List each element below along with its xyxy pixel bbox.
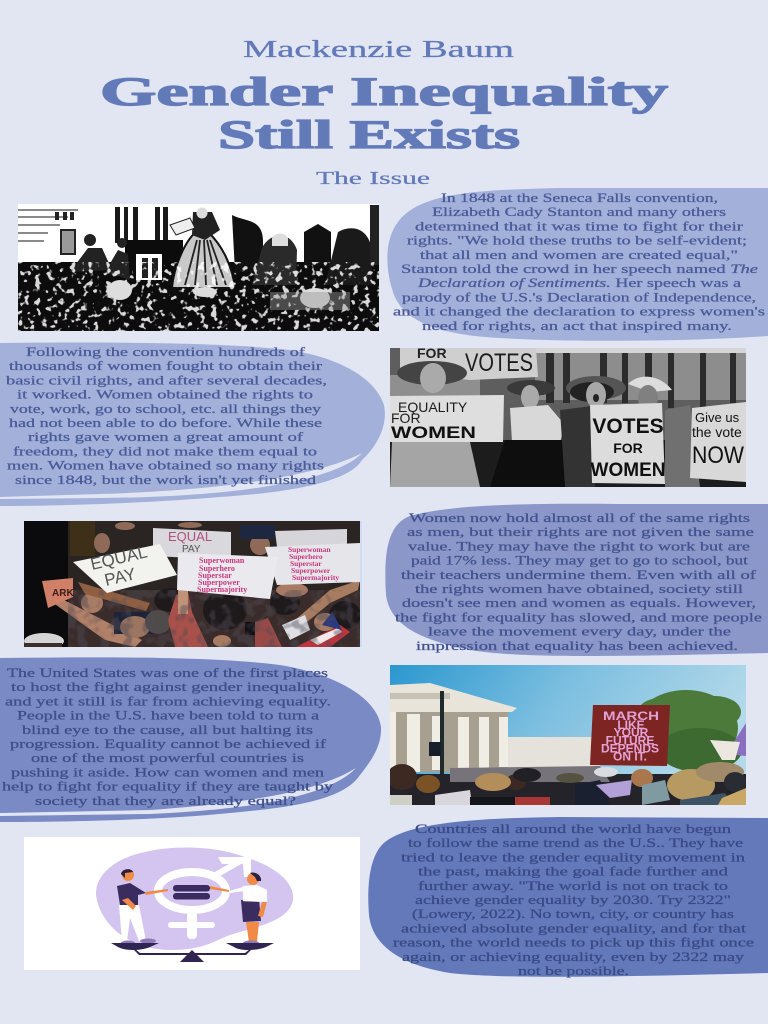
crowd (387, 762, 746, 805)
panel: United States text: progression. Equality cannot be achieved if (10, 737, 327, 751)
panel: Seneca Falls text (387, 188, 768, 341)
panel: rights not valued text: the fight for equality has slowed, and more people (395, 610, 763, 624)
panel: Seneca Falls text: need for rights, an act that inspired many. (422, 319, 732, 333)
panel: rights not valued text: their teachers undermine them. Even with all of (401, 568, 757, 582)
panel: United States text: society that they are already equal? (35, 794, 297, 808)
panel: rights not valued text: value. They may have the right to work but are (408, 539, 751, 553)
sign: superwoman centre: Superhero (199, 564, 235, 573)
sign: march like your future: YOUR (614, 726, 649, 740)
panel: Seneca Falls text: Stanton told the crowd in her speech named The (401, 262, 759, 276)
sign: votes for women (590, 403, 665, 484)
sign: equality for women: WOMEN (391, 423, 476, 442)
sign: equal pay top: EQUAL (168, 529, 212, 544)
sign: superwoman centre: Supermajority (197, 585, 247, 594)
section heading: The Issue (316, 168, 430, 188)
panel: worldwide trend text: achieve gender equality by 2030. Try 2322" (415, 893, 731, 907)
sign: give us the vote now: NOW (692, 442, 744, 469)
panel: fight for civil rights text: it worked. Women obtained the rights to (17, 388, 313, 402)
panel: United States text: one of the most powerful countries is (31, 751, 304, 765)
panel: fight for civil rights text: thousands of women fought to obtain their (9, 359, 323, 373)
image: equal pay rally (24, 521, 361, 649)
sign: give us the vote now: Give us (695, 410, 740, 425)
panel: Seneca Falls text: In 1848 at the Seneca Falls convention, (441, 191, 718, 205)
panel: Seneca Falls text: Elizabeth Cady Stanton and many others (432, 205, 726, 219)
tree (634, 690, 742, 772)
sign: votes for women: VOTES (592, 415, 664, 438)
panel: fight for civil rights text: rights gave women a great amount of (28, 430, 304, 444)
panel: worldwide trend text: the past, making the goal fade further and (418, 865, 729, 879)
panel: worldwide trend text: not be possible. (518, 964, 629, 978)
sign: superwoman right (265, 543, 360, 585)
panel: United States text: to host the fight against gender inequality, (11, 680, 325, 694)
panel: rights not valued text (385, 504, 768, 656)
sign: votes for women: FOR (613, 440, 643, 456)
sign: equal pay top: PAY (182, 544, 201, 555)
panel: worldwide trend text: to follow the same trend as the U.S.. They have (408, 836, 744, 850)
title: Gender Inequality (100, 69, 668, 114)
image: woodcut of the convention (18, 204, 379, 331)
panel: fight for civil rights text (0, 343, 385, 506)
title (100, 69, 668, 157)
sign: votes: VOTES (465, 349, 533, 377)
sign: votes for women: WOMEN (591, 460, 665, 481)
panel: worldwide trend text: achieved absolute gender equality, and for that (401, 921, 747, 935)
sign: equality for women: EQUALITY (398, 399, 468, 415)
panel: fight for civil rights text: basic civil rights, and after several decades, (6, 373, 327, 387)
panel: United States text: The United States was one of the first places (7, 666, 328, 680)
panel: rights not valued text: impression that equality has been achieved. (416, 639, 738, 653)
sign: no ark: ARK (52, 588, 74, 599)
figure: man (117, 869, 168, 946)
panel: United States text (0, 657, 381, 822)
sign: equal pay left: PAY (103, 564, 138, 590)
sign: superwoman centre: Superstar (198, 571, 232, 580)
sign: march like your future: LIKE (617, 718, 645, 732)
panel: worldwide trend text: (Lowery, 2022). No town, city, or country has (412, 907, 734, 921)
panel: Seneca Falls text: Declaration of Sentiments. Her speech was a (417, 276, 742, 290)
image: suffragettes with signs (390, 345, 746, 487)
sign: equal pay top (153, 528, 231, 560)
sign: march like your future: ON IT. (613, 750, 647, 764)
panel: rights not valued text: Women now hold almost all of the same rights (409, 511, 750, 525)
panel: rights not valued text: doesn't see men and women as equals. However, (402, 596, 756, 610)
icon: gender symbol (158, 857, 251, 939)
panel: worldwide trend text: reason, the world needs to pick up this fight once (393, 936, 755, 950)
sign: superwoman right: Superhero (289, 552, 323, 561)
panel: United States text: blind eye to the cause, all but halting its (22, 723, 313, 737)
panel: worldwide trend text (368, 817, 768, 978)
panel: worldwide trend text: Countries all around the world have begun (415, 822, 732, 836)
panel: fight for civil rights text: since 1848, but the work isn't yet finished (15, 473, 317, 487)
sign: superwoman centre: Superpower (198, 578, 240, 587)
panel: rights not valued text: paid 17% less. They may get to go to school, but (411, 554, 749, 568)
panel: fight for civil rights text: vote, work, go to school, etc. all things they (10, 402, 322, 416)
sign: give us the vote now (690, 402, 746, 482)
sign: march like your future: MARCH (603, 709, 659, 723)
panel: Seneca Falls text: rights. "We hold these truths to be self-evident; (407, 234, 747, 248)
panel: Seneca Falls text: parody of the U.S.'s Declaration of Independence, (402, 290, 756, 304)
panel: worldwide trend text: tried to leave the gender equality movement in (401, 850, 746, 864)
sign: march like your future (590, 705, 670, 766)
panel: United States text: People in the U.S. have been told to turn a (17, 709, 320, 723)
sign: march like your future: FUTURE (606, 734, 654, 748)
sign: march like your future: DEPENDS (601, 742, 659, 756)
sign: equality for women: FOR (391, 410, 421, 426)
image: gender equality illustration (24, 837, 360, 970)
sign: superwoman right: Superstar (290, 559, 322, 568)
sign: superwoman right: Supermajority (292, 573, 339, 582)
sign: votes: FOR (417, 345, 447, 361)
panel: fight for civil rights text: freedom, they did not make them equal to (13, 444, 317, 458)
title: Still Exists (218, 112, 520, 157)
author name: Mackenzie Baum (243, 37, 515, 63)
icon: balance scale (111, 943, 274, 962)
panel: United States text: help to fight for equality if they are taught by (2, 780, 334, 794)
image: march at the Supreme Court (387, 665, 746, 805)
panel: Seneca Falls text: and it changed the declaration to express women's (393, 305, 765, 319)
sign: give us the vote now: the vote (692, 424, 742, 440)
sign: equal pay left (73, 542, 177, 593)
sign: no ark (42, 578, 74, 608)
panel: United States text: pushing it aside. How can women and men (11, 765, 325, 779)
courthouse (390, 683, 517, 772)
sign: superwoman centre (177, 553, 278, 599)
panel: fight for civil rights text: Following the convention hundreds of (26, 345, 306, 359)
sign: votes (400, 345, 538, 380)
sign: superwoman right: Superpower (291, 566, 331, 575)
sign: superwoman centre: Superwoman (199, 556, 245, 565)
sign: equality for women (390, 395, 504, 442)
panel: Seneca Falls text: determined that it was time to fight for their (415, 219, 744, 233)
panel: United States text: and yet it still is far from achieving equality. (5, 694, 331, 708)
sign: equal pay left: EQUAL (89, 542, 149, 574)
panel: fight for civil rights text: men. Women have obtained so many rights (7, 459, 324, 473)
panel: Seneca Falls text: that all men and women are created equal," (420, 248, 738, 262)
figure: woman (210, 873, 267, 946)
panel: rights not valued text: the rights women have obtained, society still (415, 582, 744, 596)
american flag (296, 612, 350, 647)
panel: worldwide trend text: again, or achieving equality, even by 2322 may (402, 950, 745, 964)
sign: superwoman right: Superwoman (288, 545, 331, 554)
panel: rights not valued text: as men, but their rights are not given the same (407, 525, 755, 539)
panel: worldwide trend text: further away. "The world is not on track to (418, 879, 728, 893)
panel: rights not valued text: leave the movement every day, under the (428, 625, 732, 639)
panel: fight for civil rights text: had not been able to do before. While these (9, 416, 323, 430)
